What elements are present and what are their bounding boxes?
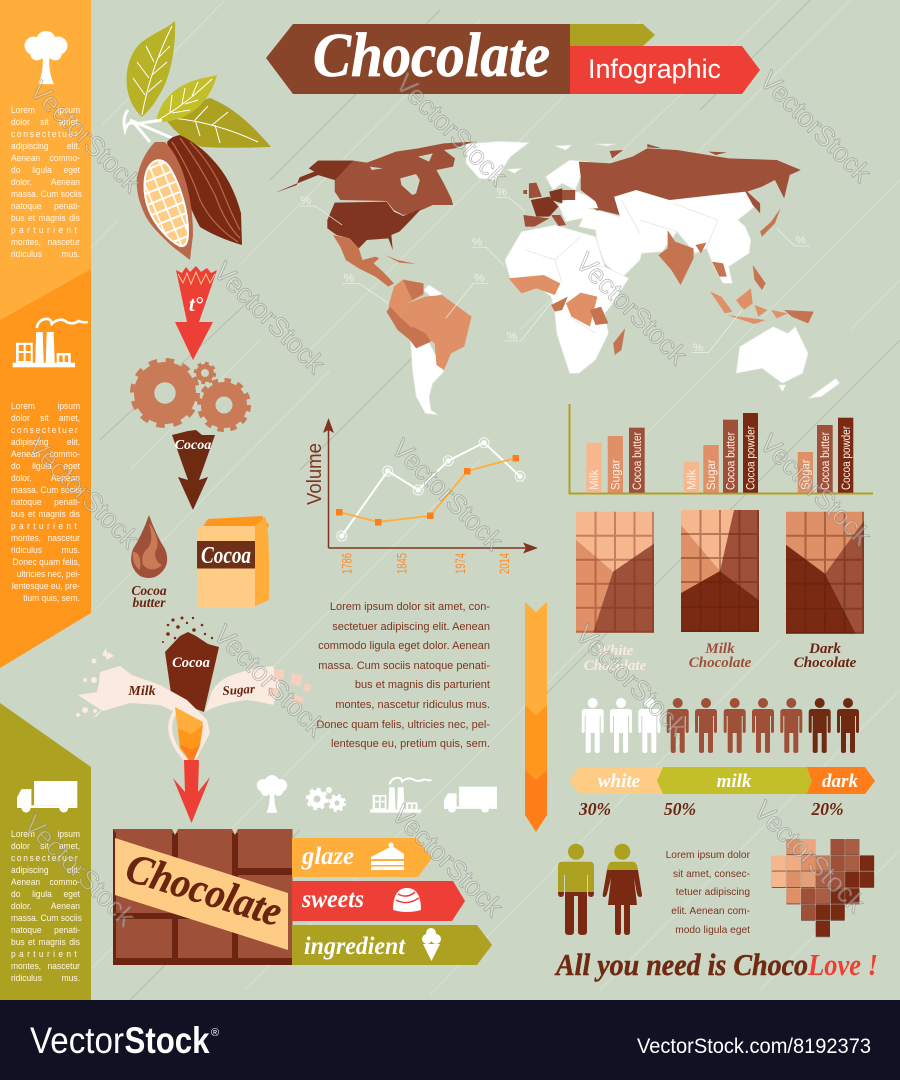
text block: left sidebar middle: tium quis, sem. [23, 593, 80, 604]
ribbon: ingredient: ingredient [304, 933, 406, 960]
leaf 2 [156, 75, 217, 122]
milk swoosh [76, 648, 210, 767]
world map: % [693, 342, 703, 354]
text block: left sidebar bottom: do ligula eget [11, 889, 80, 900]
footer bar: Stock [124, 1020, 210, 1061]
stacked percent bar: dark [822, 771, 858, 792]
line chart [304, 418, 538, 574]
stacked percent bar [569, 767, 875, 794]
text block: left sidebar bottom: dolor. Aenean [11, 901, 80, 912]
tagline: Love ! [807, 947, 878, 982]
ribbon: glaze: glaze [301, 843, 354, 870]
world map: % [301, 195, 311, 207]
text block: left sidebar bottom: consectetuer [11, 853, 79, 864]
stem [124, 110, 172, 142]
text block: couple paragraph [666, 850, 750, 936]
world map: % [474, 273, 485, 284]
text block: left sidebar middle: consectetuer [11, 425, 79, 436]
bar chart: Cocoa powder [841, 426, 853, 490]
text block: left sidebar bottom [11, 829, 82, 984]
percent labels: 50% [664, 799, 696, 819]
world map: % [796, 235, 806, 246]
bar chart: Sugar [706, 459, 718, 490]
text: VectorStock [754, 65, 877, 188]
icon: process gears [133, 361, 248, 429]
text block: left sidebar middle: dolor sit amet, [11, 413, 80, 424]
text block: left sidebar top: ridiculus mus. [11, 249, 80, 260]
icon: truck small [444, 787, 497, 813]
text block: left sidebar middle: Lorem ipsum [11, 401, 80, 412]
white chocolate bar [576, 512, 654, 633]
text block: left sidebar top: massa. Cum sociis [11, 189, 82, 200]
text block: left sidebar middle [11, 401, 82, 604]
chocolate bar [113, 829, 292, 965]
stacked percent bar: milk [717, 771, 752, 792]
text block: left sidebar top: dolor. Aenean [11, 177, 80, 188]
text block: left sidebar bottom: parturient [11, 949, 80, 960]
text block: left sidebar middle: parturient [11, 521, 80, 532]
text block: left sidebar middle: lentesque eu, pre- [12, 581, 80, 592]
labels: chocolate types: Chocolate [794, 655, 857, 671]
text block: left sidebar bottom: montes, nascetur [11, 961, 80, 972]
text block: left sidebar top [11, 105, 82, 260]
arrow: red down [173, 760, 210, 823]
icon: gears small [308, 787, 344, 810]
world map: % [472, 237, 482, 248]
percent labels: 30% [578, 799, 611, 819]
text block: left sidebar top: bus et magnis dis [11, 213, 80, 224]
text block: center paragraph: Donec quam felis, ultricies nec, pel- [316, 719, 490, 731]
icon: pixel chocolate heart [772, 839, 874, 936]
text block: left sidebar middle: ridiculus mus. [11, 545, 80, 556]
text block: left sidebar middle: adipiscing elit. [11, 437, 80, 448]
panel: left sidebar olive [0, 703, 91, 1000]
text block: couple paragraph: Lorem ipsum dolor [666, 850, 750, 861]
title banner: Chocolate [313, 22, 550, 90]
text block: left sidebar top: do ligula eget [11, 165, 80, 176]
title banner [266, 22, 760, 94]
icon row [257, 775, 497, 813]
labels: chocolate types: White [597, 643, 634, 659]
ribbon: sweets: sweets [301, 886, 364, 913]
footer bar: Vector [30, 1020, 124, 1061]
text: VectorStock [386, 433, 509, 556]
bar chart: Cocoa butter [726, 432, 738, 490]
icon: tree [25, 31, 67, 84]
people pictogram [582, 698, 859, 753]
title banner: Infographic [588, 54, 721, 84]
bar chart: Milk [686, 469, 698, 490]
icon: cocoa butter drop [131, 515, 167, 578]
label: cocoa butter [131, 583, 167, 610]
sugar swoosh [170, 666, 312, 767]
text: VectorStock [24, 75, 147, 198]
labels: chocolate types [584, 641, 857, 674]
line chart: 1974 [452, 553, 468, 574]
arrow: roasting flame: t° [189, 292, 204, 316]
world map: % [497, 187, 507, 198]
text block: left sidebar bottom: massa. Cum sociis [11, 913, 82, 924]
text block: left sidebar middle: montes, nascetur [11, 533, 80, 544]
text block: center paragraph: commodo ligula eget dolor. Aenean [318, 640, 490, 652]
text block: couple paragraph: sit amet, consec- [673, 869, 750, 880]
text block: left sidebar bottom: bus et magnis dis [11, 937, 80, 948]
line chart: 1786 [338, 553, 354, 574]
text block: center paragraph: bus et magnis dis parturient [355, 679, 490, 691]
percent labels: 20% [810, 799, 844, 819]
footer bar: VectorStock.com/8192373 [637, 1035, 871, 1058]
text block: left sidebar bottom: Aenean commo- [11, 877, 80, 888]
footer bar [0, 1000, 900, 1080]
text: VectorStock [18, 809, 141, 932]
line chart: 2014 [496, 553, 512, 574]
icon: truck [17, 781, 77, 812]
ribbon: glaze [292, 838, 432, 877]
text block: left sidebar middle: Aenean commo- [11, 449, 80, 460]
icon: cake [371, 842, 404, 870]
bar chart: Sugar [610, 459, 622, 490]
bar chart: Sugar [800, 459, 812, 490]
illustration: cocoa leaves and pods [124, 21, 271, 260]
world map: % [344, 273, 354, 284]
panel: left sidebar orange [0, 0, 91, 668]
text: VectorStock [208, 256, 331, 379]
open pod [137, 142, 193, 260]
labels: chocolate types: Milk [704, 641, 735, 657]
icon: ice cream [422, 928, 441, 961]
text: VectorStock [748, 795, 871, 918]
cone layers [175, 707, 203, 764]
icon: cocoa bag [197, 516, 269, 608]
text block: left sidebar bottom: dolor sit amet, [11, 841, 80, 852]
world map [276, 141, 840, 415]
text block: left sidebar bottom: natoque penati- [11, 925, 80, 936]
text block: center paragraph: lentesque eu, pretium quis, sem. [331, 738, 490, 750]
line chart: 1845 [394, 553, 410, 574]
illustration: mixing milk, sugar and cocoa [76, 616, 312, 767]
text block: left sidebar top: Lorem ipsum [11, 105, 80, 116]
text block: couple paragraph: modo ligula eget [675, 925, 750, 936]
text block: left sidebar bottom: ridiculus mus. [11, 973, 80, 984]
bar chart: Milk [589, 469, 601, 490]
text block: center paragraph: sectetuer adipiscing elit. Aenean [332, 621, 490, 633]
icon: sweet [393, 888, 421, 912]
footer bar: ® [211, 1027, 219, 1039]
text: VectorStock [208, 619, 331, 742]
text block: left sidebar middle: do ligula eget [11, 461, 80, 472]
tagline: All you need is Choco [554, 947, 808, 982]
text: VectorStock [386, 799, 509, 922]
cocoa funnel [162, 616, 219, 712]
illustration: mixing milk, sugar and cocoa: Milk [127, 684, 156, 699]
icon: cocoa bag: Cocoa [201, 543, 251, 569]
icon: woman [603, 844, 642, 935]
label: cocoa butter: Cocoa [131, 583, 167, 598]
labels: chocolate types: Chocolate [584, 658, 647, 674]
text block: left sidebar middle: ultricies nec, pel- [17, 569, 80, 580]
dark chocolate bar [786, 512, 864, 634]
stacked percent bar: white [598, 771, 641, 792]
text block: left sidebar middle: Donec quam felis, [12, 557, 80, 568]
bar chart: Cocoa butter [820, 432, 832, 490]
labels: chocolate types: Chocolate [689, 655, 752, 671]
text block: left sidebar top: consectetuer [11, 129, 79, 140]
text: VectorStock [570, 247, 693, 370]
bar chart [570, 404, 873, 494]
text block: left sidebar middle: dolor. Aenean [11, 473, 80, 484]
bar chart: Cocoa powder [746, 426, 758, 490]
text block: left sidebar top: montes, nascetur [11, 237, 80, 248]
text block: left sidebar top: adipiscing elit. [11, 141, 80, 152]
text block: left sidebar bottom: adipiscing elit. [11, 865, 80, 876]
text block: left sidebar middle: bus et magnis dis [11, 509, 80, 520]
text: VectorStock [22, 431, 145, 554]
icon: tree small [257, 775, 287, 813]
text block: left sidebar middle: massa. Cum sociis [11, 485, 82, 496]
funnel: cocoa [172, 430, 215, 510]
text block: left sidebar top: dolor sit amet, [11, 117, 80, 128]
text block: left sidebar middle: natoque penati- [11, 497, 80, 508]
text block: center paragraph: montes, nascetur ridiculus mus. [335, 699, 490, 711]
text block: center paragraph [316, 601, 490, 750]
line chart: Volume [304, 443, 326, 505]
text block: left sidebar top: natoque penati- [11, 201, 80, 212]
arrow: vertical orange [525, 602, 547, 832]
text block: center paragraph: massa. Cum sociis natoque penati- [318, 660, 490, 672]
text: VectorStock [390, 68, 513, 191]
text block: couple paragraph: elit. Aenean com- [671, 906, 750, 917]
icon: man [558, 844, 594, 935]
label: cocoa butter: butter [132, 595, 166, 610]
leaf 1 [127, 21, 175, 117]
text block: left sidebar top: parturient [11, 225, 80, 236]
text block: left sidebar bottom: Lorem ipsum [11, 829, 80, 840]
closed pod [167, 135, 242, 245]
text block: couple paragraph: tetuer adipiscing [676, 887, 750, 898]
ribbon: ingredient [292, 925, 492, 965]
text block: center paragraph: Lorem ipsum dolor sit amet, con- [330, 601, 490, 613]
world map: % [507, 331, 517, 342]
illustration: mixing milk, sugar and cocoa: Sugar [222, 681, 256, 698]
funnel: cocoa: Cocoa [175, 438, 211, 453]
bar chart: Cocoa butter [632, 432, 644, 490]
icon: factory small [370, 778, 432, 813]
illustration: mixing milk, sugar and cocoa: Cocoa [172, 655, 210, 671]
percent labels [578, 799, 844, 819]
chocolate bar: Chocolate [121, 845, 287, 936]
text: VectorStock [570, 619, 693, 742]
arrow: roasting flame [175, 266, 217, 360]
text block: left sidebar top: Aenean commo- [11, 153, 80, 164]
text: VectorStock [754, 428, 877, 551]
ribbon: sweets [292, 881, 465, 921]
icon: factory [13, 319, 88, 367]
labels: chocolate types: Dark [808, 641, 841, 657]
leaf 3 [165, 98, 271, 148]
milk chocolate bar [681, 510, 759, 632]
